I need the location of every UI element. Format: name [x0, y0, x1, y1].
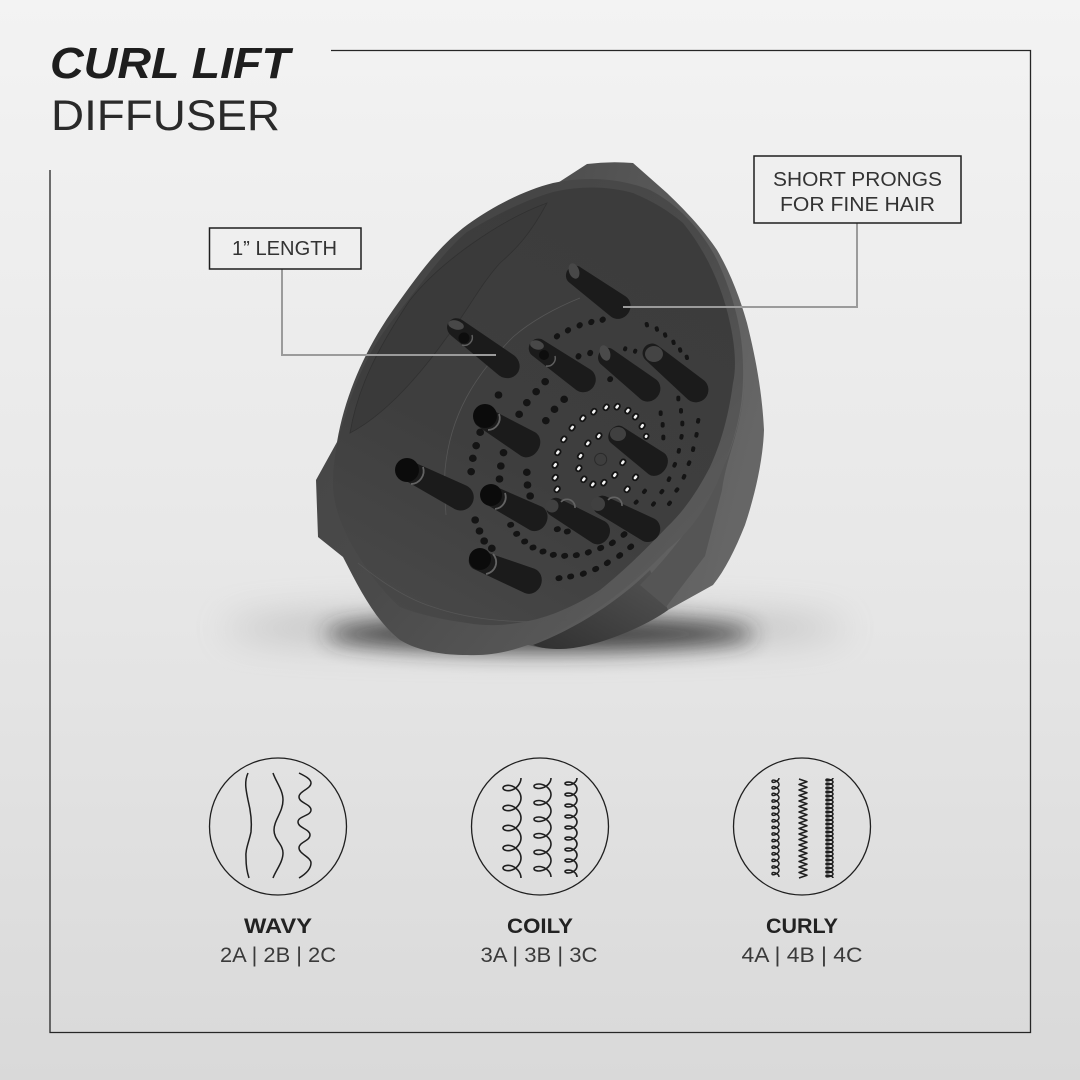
- title: DIFFUSER: [51, 92, 280, 140]
- diffuser front rim: [316, 179, 743, 655]
- round holes: left side: [471, 382, 564, 548]
- ground shadow: [225, 612, 845, 651]
- callout: short prongs: [623, 156, 961, 307]
- lower bowl facet: [640, 380, 745, 607]
- upper left panel seam: [350, 203, 547, 433]
- narrow holes: right side: [625, 324, 698, 505]
- prong 8: [392, 454, 478, 515]
- plate arcs: [358, 298, 580, 622]
- prong 10: [542, 492, 614, 548]
- label: wavy: WAVY: [244, 915, 312, 938]
- diffuser inner face: [333, 188, 735, 625]
- oval holes: top and bottom: [510, 319, 631, 578]
- icon: curly strands: [734, 758, 870, 895]
- vented ring: light slits: [555, 406, 646, 490]
- hair type: coily: [472, 758, 608, 967]
- leader line: [623, 223, 857, 307]
- label: coily: COILY: [507, 915, 573, 938]
- label box: [210, 228, 361, 269]
- leader line: [282, 269, 496, 355]
- prong 9: [477, 479, 552, 535]
- title: CURL LIFT: [50, 39, 293, 88]
- callout: 1 inch length: [210, 228, 496, 355]
- center dimple: [595, 453, 607, 465]
- hair type: wavy: [210, 758, 346, 967]
- label text: [773, 169, 942, 216]
- types: wavy: 2A | 2B | 2C: [220, 944, 336, 967]
- label: curly: CURLY: [766, 915, 838, 938]
- product: diffuser: [225, 162, 845, 655]
- prong 2: [441, 312, 525, 383]
- types: curly: 4A | 4B | 4C: [742, 944, 862, 967]
- prong 3: [523, 333, 601, 397]
- prongs: [392, 260, 714, 598]
- prong 1: [561, 260, 635, 324]
- label text: SHORT PRONGS: [773, 169, 942, 191]
- label box: [754, 156, 961, 223]
- title: [50, 39, 293, 140]
- prong 7: [603, 420, 673, 480]
- hair type: curly: [734, 758, 870, 967]
- bowl underside: [533, 570, 668, 649]
- prong 5: [637, 337, 714, 407]
- prong 12: [465, 544, 546, 598]
- vented ring: dark surrounds: [555, 406, 646, 490]
- prong 6: [469, 401, 545, 462]
- label text: 1” LENGTH: [232, 237, 337, 260]
- label text: FOR FINE HAIR: [780, 194, 935, 216]
- prong 11: [588, 490, 665, 546]
- diffuser back bowl: [515, 162, 764, 649]
- icon: coily strands: [472, 758, 608, 895]
- icon: wavy strands: [210, 758, 346, 895]
- prong 4: [592, 342, 665, 406]
- hole rings: [471, 319, 698, 578]
- types: coily: 3A | 3B | 3C: [480, 944, 598, 967]
